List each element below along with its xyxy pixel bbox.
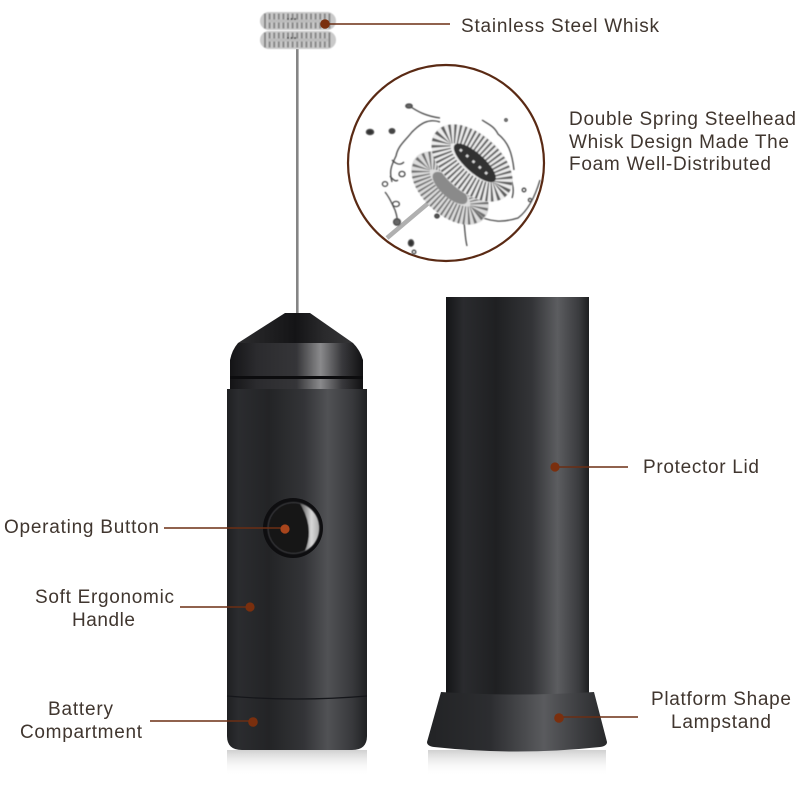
operating button [268, 502, 319, 554]
label: stainless steel whisk: Stainless Steel Whisk [461, 16, 660, 37]
whisk stem in detail [387, 200, 432, 238]
handle body [227, 389, 367, 750]
motor cone head [238, 313, 353, 343]
reflection under lid [428, 750, 606, 776]
collar groove [230, 376, 363, 379]
label: soft ergonomic handle: Handle [72, 610, 135, 631]
label: soft ergonomic handle: Soft Ergonomic [35, 587, 174, 608]
label: soft ergonomic handle [35, 587, 255, 631]
lower collar ring [230, 379, 363, 390]
front spring coil [417, 109, 527, 217]
label: battery compartment: Compartment [20, 722, 143, 743]
metallic collar [230, 343, 363, 377]
label: platform shape lampstand: Lampstand [671, 712, 771, 733]
label: battery compartment [20, 699, 258, 743]
label: platform shape lampstand [554, 689, 791, 733]
label: protector lid: Protector Lid [643, 457, 759, 478]
whisk wire shaft [296, 49, 299, 314]
text block: double spring description: Whisk Design Made The [569, 132, 789, 153]
callout circle: double spring whisk detail [348, 65, 544, 261]
text block: double spring description: Foam Well-Distributed [569, 154, 771, 175]
platform lampstand base [427, 692, 607, 752]
label: platform shape lampstand: Platform Shape [651, 689, 791, 710]
reflection under handle [227, 750, 367, 776]
battery compartment seam [227, 696, 367, 699]
lower whisk spring [260, 31, 336, 49]
text block: double spring description: Double Spring Steelhead [569, 109, 796, 130]
protector lid product [427, 297, 607, 776]
label: battery compartment: Battery [48, 699, 114, 720]
label: operating button [4, 517, 290, 538]
upper whisk spring [260, 12, 336, 30]
label: protector lid [550, 457, 759, 478]
operating button recess [263, 498, 323, 558]
lid cylinder [446, 297, 589, 697]
water splash [366, 104, 540, 254]
label: stainless steel whisk [320, 16, 660, 37]
label: operating button: Operating Button [4, 517, 159, 538]
icon: stainless steel whisk [260, 12, 336, 314]
text block: double spring description [569, 109, 796, 175]
rear spring coil [398, 137, 502, 239]
frother handle product [227, 313, 367, 776]
